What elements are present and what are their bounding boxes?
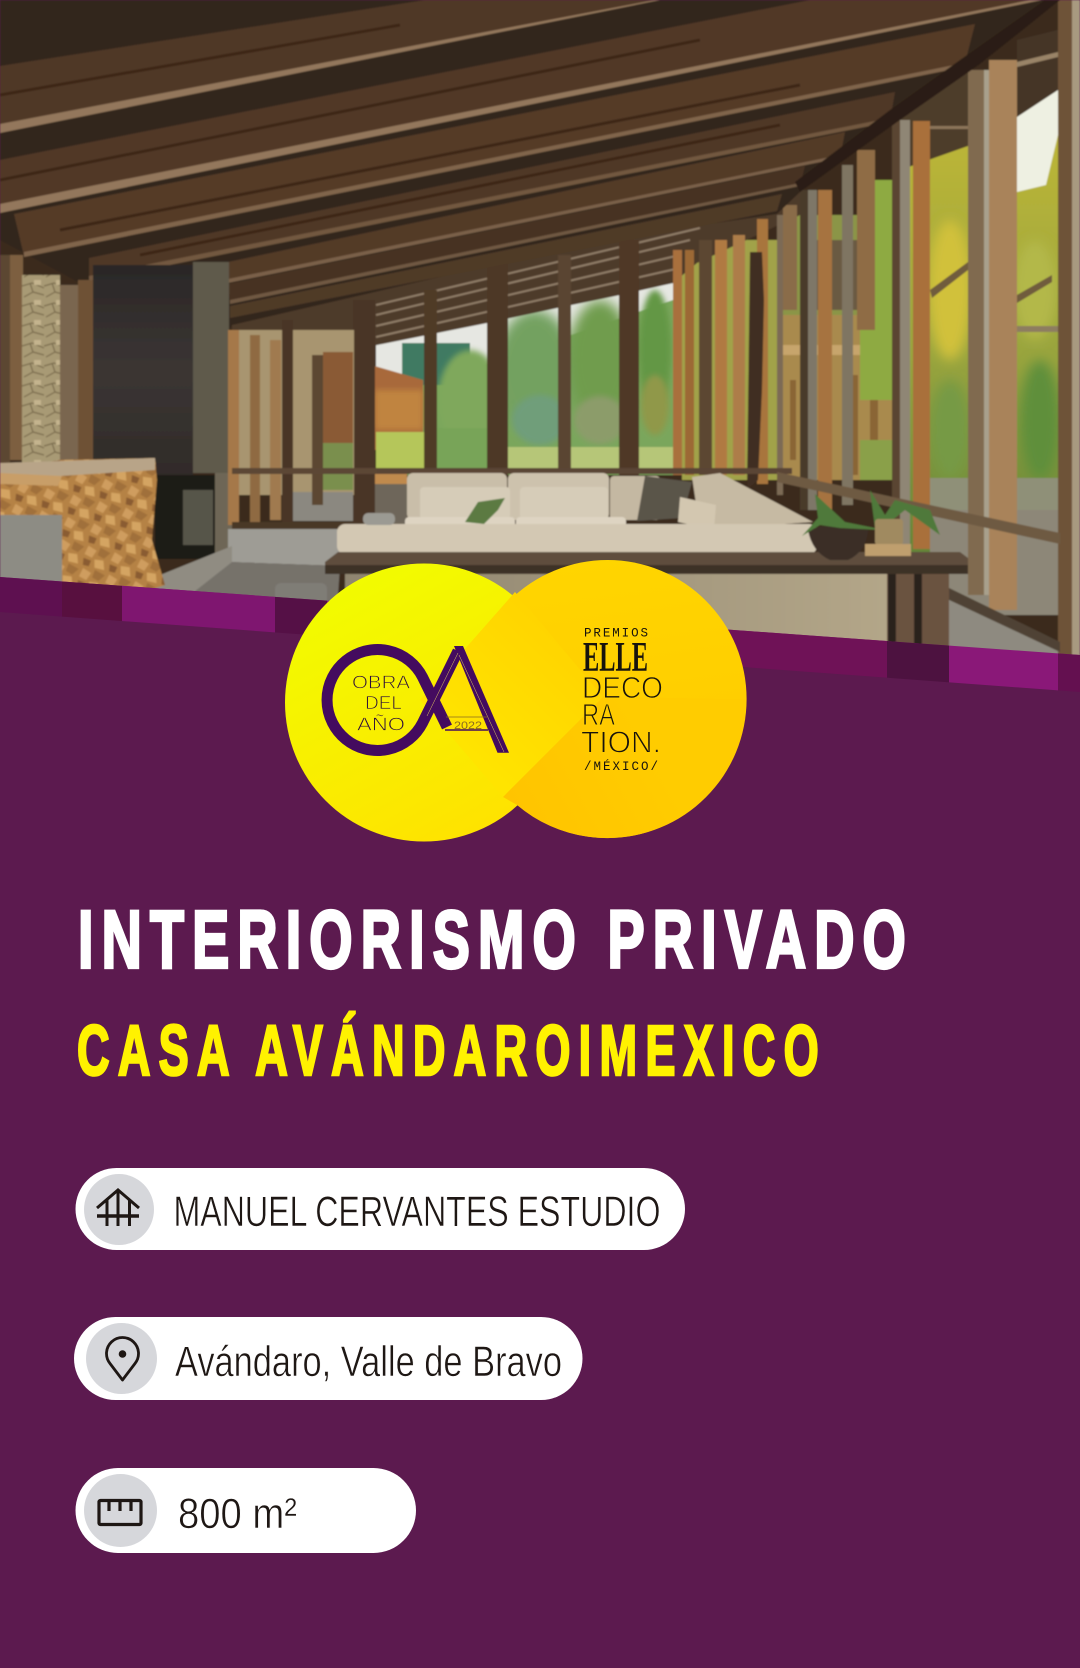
left columns and stone wall [0, 255, 93, 465]
icon: ruler [99, 1500, 141, 1524]
purple panel [0, 612, 1080, 1668]
pill: location [74, 1317, 582, 1400]
fireplace [93, 262, 232, 561]
Premios Elle Decoration wordmark: /MÉXICO/ [584, 759, 658, 774]
Premios Elle Decoration wordmark: DECO [582, 670, 663, 705]
right amber circle [469, 560, 747, 838]
floor [154, 528, 340, 601]
window rails [376, 467, 1060, 652]
Obra del Año mark: OBRA [352, 672, 410, 692]
Premios Elle Decoration wordmark: RA [582, 697, 615, 732]
Obra del Año mark: DEL [365, 693, 402, 713]
lower amber wedge [503, 697, 746, 838]
garden behind the central windows [374, 238, 778, 482]
pill: area [76, 1468, 416, 1553]
label: 800 m² [178, 1490, 297, 1538]
bowl and plant on table [276, 490, 940, 600]
Premios Elle Decoration wordmark: ELLE [583, 635, 648, 681]
Premios Elle Decoration wordmark [581, 626, 663, 774]
translucent magenta band [0, 577, 1080, 692]
logo pair: Obra del Año and Premios Elle Decoration [285, 560, 747, 842]
Obra del Año mark: AÑO [357, 714, 405, 734]
ceiling with beams [0, 0, 1080, 330]
left yellow circle [285, 564, 563, 842]
pill: studio [76, 1168, 685, 1250]
photo: interior of Casa Avándaro [0, 0, 1080, 700]
icon: map pin [106, 1338, 139, 1380]
label: MANUEL CERVANTES ESTUDIO [174, 1188, 660, 1236]
ribbon between the circles [420, 592, 603, 797]
slatted soffit above the windows [232, 193, 800, 346]
icon: house [97, 1190, 139, 1226]
back corridor with stone and columns [228, 320, 407, 530]
Premios Elle Decoration wordmark: TION. [581, 724, 661, 760]
back wooden structure on the right [783, 180, 895, 480]
garden seen through right windows [902, 30, 1060, 654]
window mullions [353, 0, 1080, 660]
Obra del Año mark: 2022 [454, 720, 482, 732]
firewood stack [0, 456, 166, 588]
label: Avándaro, Valle de Bravo [175, 1338, 562, 1386]
Obra del Año mark [327, 646, 509, 753]
sofa [337, 473, 817, 554]
table [324, 551, 969, 646]
Premios Elle Decoration wordmark: PREMIOS [584, 626, 648, 640]
